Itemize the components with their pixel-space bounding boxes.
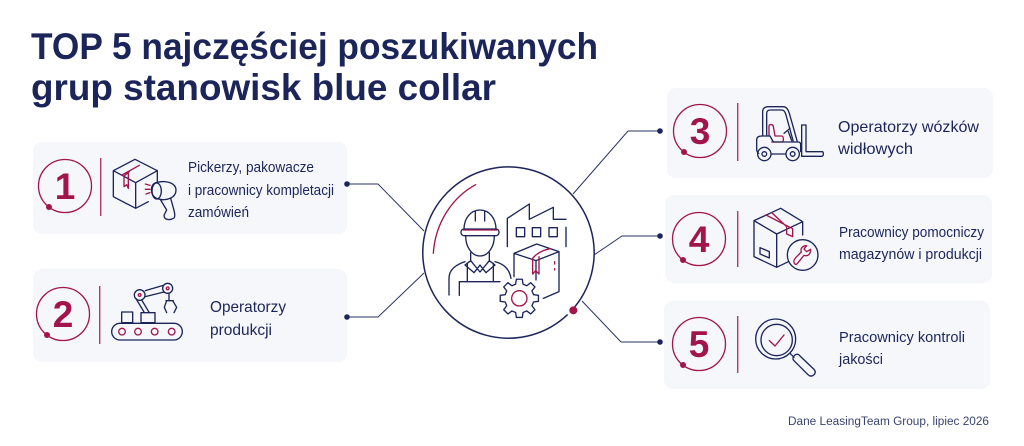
connector: card 4 to centre — [594, 233, 663, 255]
text: Pickerzy, pakowacze — [188, 159, 314, 176]
panel: 5 quality control — [664, 301, 990, 389]
text: Operatorzy — [210, 299, 286, 316]
title — [31, 26, 598, 108]
text — [210, 299, 286, 339]
text — [837, 119, 979, 158]
text: Pracownicy kontroli — [839, 329, 965, 346]
factory — [507, 204, 566, 247]
number badge 3 — [674, 104, 726, 158]
title: grup stanowisk blue collar — [31, 67, 496, 108]
number badge 5 — [672, 318, 726, 370]
title: TOP 5 najczęściej poszukiwanych — [31, 26, 598, 67]
text — [839, 224, 984, 263]
connector: card 5 to centre — [582, 301, 663, 345]
connector: card 1 to centre — [344, 181, 424, 231]
panel: 2 production operators — [33, 269, 347, 362]
panel: 4 warehouse helpers — [665, 195, 992, 283]
text: produkcji — [210, 322, 272, 339]
text: i pracownicy kompletacji — [188, 182, 334, 199]
text: Operatorzy wózków — [838, 119, 979, 136]
central circle with worker illustration — [422, 167, 594, 339]
text: zamówień — [188, 204, 249, 221]
icon: box with wrench — [754, 208, 818, 270]
number badge 1: 1 — [55, 166, 75, 207]
text: jakości — [838, 351, 883, 368]
icon: magnifier with check — [756, 319, 815, 376]
source note: Dane LeasingTeam Group, lipiec 2026 — [788, 416, 989, 428]
number badge 4: 4 — [689, 219, 710, 260]
worker — [449, 210, 511, 295]
number badge 2: 2 — [53, 294, 73, 335]
panel: 1 pickers — [33, 142, 347, 234]
icon: robot arm on conveyor — [112, 283, 182, 340]
text: Pracownicy pomocniczy — [839, 224, 984, 241]
connector: card 3 to centre — [573, 128, 663, 194]
text — [188, 159, 334, 221]
text: magazynów i produkcji — [839, 246, 982, 263]
number badge 5: 5 — [689, 324, 709, 365]
number badge 1 — [38, 160, 92, 212]
connector: card 2 to centre — [344, 273, 424, 320]
icon: box and scanner — [113, 159, 176, 220]
text — [838, 329, 965, 368]
icon: forklift — [757, 107, 823, 161]
number badge 3: 3 — [690, 111, 710, 152]
number badge 4 — [672, 212, 726, 266]
box — [514, 244, 559, 298]
number badge 2 — [36, 288, 90, 340]
panel: 3 forklift operators — [667, 88, 993, 178]
text: widłowych — [837, 141, 913, 158]
gear — [500, 279, 538, 317]
